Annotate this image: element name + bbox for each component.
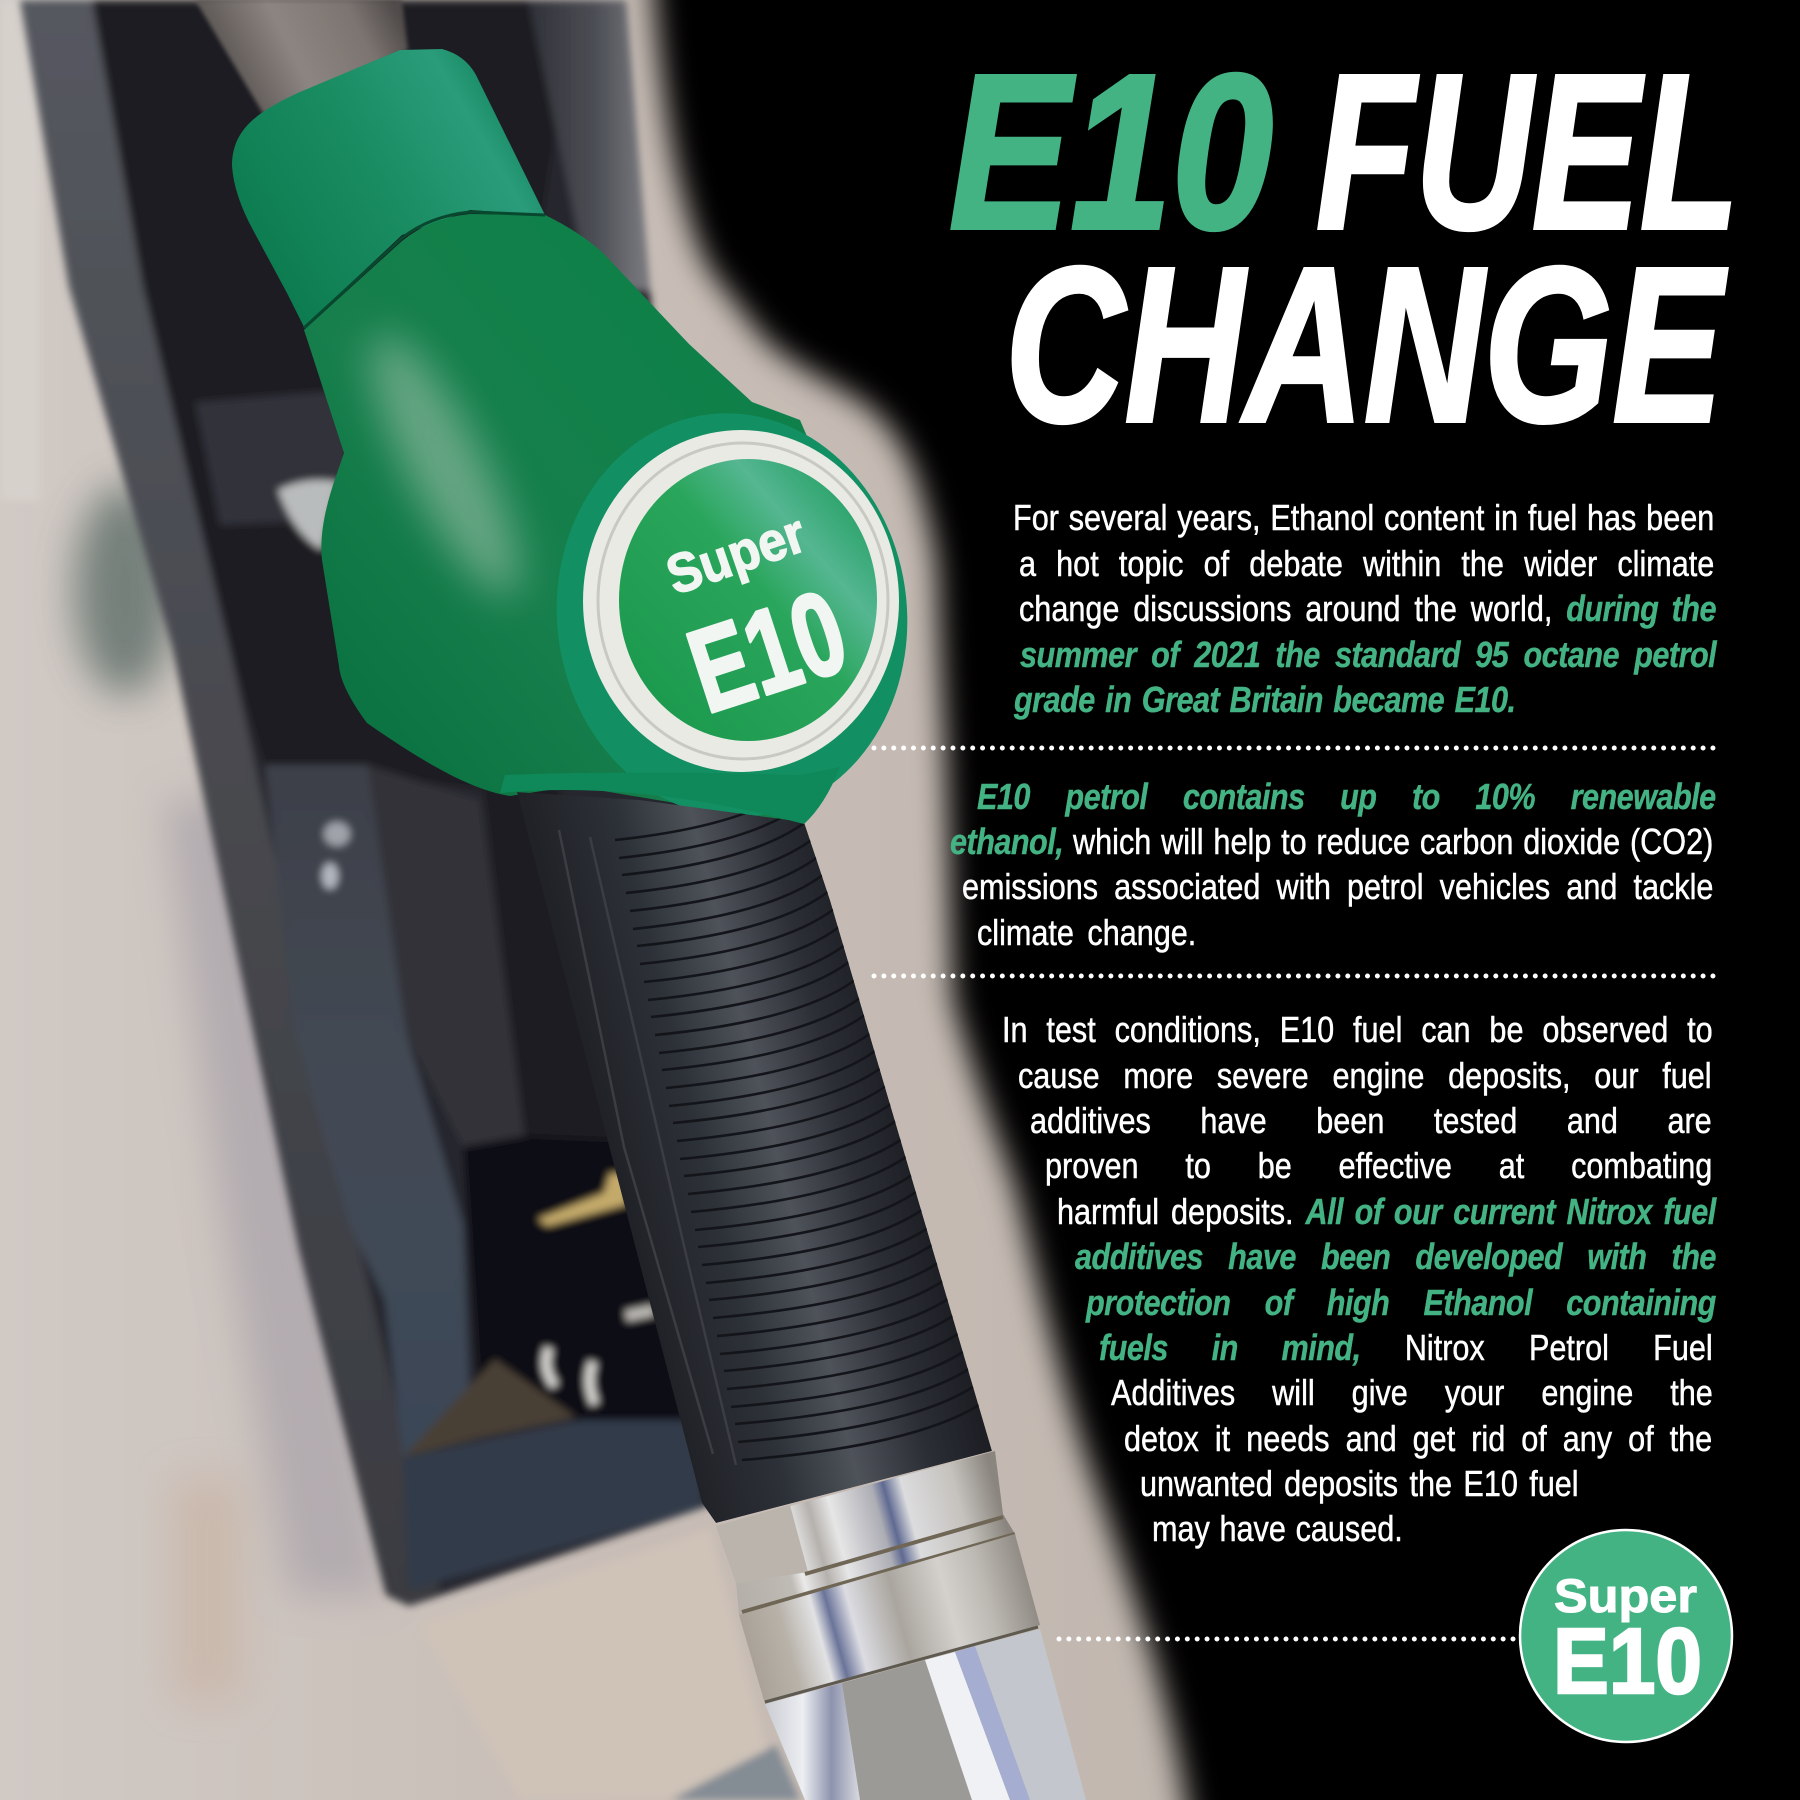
text: may have caused. (1152, 1508, 1403, 1549)
head label: E10: E10 (674, 565, 861, 739)
paragraph: additives and deposits (1002, 1009, 1717, 1549)
text: protection of high Ethanol containing (1086, 1282, 1716, 1323)
ribbed black grip (517, 785, 992, 1523)
text: In test conditions, E10 fuel can be observed to (1002, 1009, 1713, 1050)
text: unwanted deposits the E10 fuel (1140, 1463, 1579, 1504)
green nozzle body (304, 214, 860, 824)
text: change discussions around the world, during the (1019, 588, 1716, 629)
green lip over grip (500, 767, 840, 824)
text: proven to be effective at combating (1045, 1145, 1712, 1186)
text: Additives will give your engine the (1111, 1372, 1713, 1413)
metal ferrule and spout (716, 1451, 1086, 1800)
body highlight (345, 319, 545, 611)
text: grade in Great Britain became E10. (1014, 679, 1516, 720)
text: ethanol, which will help to reduce carbon dioxide (CO2) (950, 821, 1713, 862)
badge text: Super: Super (1554, 1569, 1697, 1622)
dispenser frame (20, 0, 740, 1606)
black background with soft feathered edge (650, 0, 1800, 1800)
text: additives have been tested and are (1030, 1100, 1712, 1141)
seam between collar and body (304, 212, 545, 328)
text: For several years, Ethanol content in fuel has been (1013, 497, 1714, 538)
green collar (232, 49, 545, 327)
text: E10 petrol contains up to 10% renewable (977, 776, 1716, 817)
text: additives have been developed with the (1075, 1236, 1716, 1277)
text: climate change. (977, 912, 1196, 953)
text: emissions associated with petrol vehicles and tackle (962, 866, 1713, 907)
text: fuels in mind, Nitrox Petrol Fuel (1099, 1327, 1713, 1368)
text: cause more severe engine deposits, our fuel (1018, 1055, 1712, 1096)
title word: E10: E10 (949, 28, 1273, 275)
fuel hose (195, 0, 408, 115)
photo: green Super E10 petrol pump nozzle (0, 0, 1210, 1800)
badge text: E10: E10 (1553, 1609, 1702, 1713)
text: detox it needs and get rid of any of the (1124, 1418, 1712, 1459)
text: a hot topic of debate within the wider climate (1019, 543, 1714, 584)
nozzle head (537, 396, 927, 834)
photo background: wall and dispenser frame (0, 0, 1300, 1800)
text: harmful deposits. All of our current Nitrox fuel (1057, 1191, 1716, 1232)
head label: Super: Super (659, 502, 813, 606)
paragraph: ethanol debate (1013, 497, 1718, 720)
paragraph: renewable ethanol (950, 776, 1716, 953)
text: summer of 2021 the standard 95 octane petrol (1020, 634, 1716, 675)
